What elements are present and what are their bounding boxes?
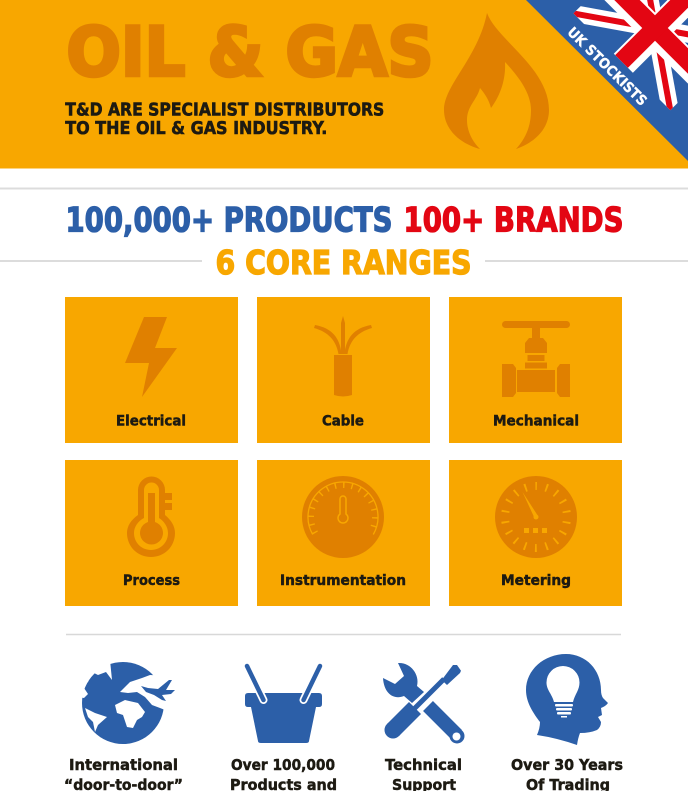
feature: international delivery — [64, 660, 183, 791]
panel: cable — [257, 297, 430, 443]
label: international door-to-door — [64, 756, 183, 791]
panel: metering — [449, 460, 622, 606]
icon: flame — [444, 13, 549, 149]
label: electrical: Electrical — [116, 414, 186, 430]
panel: electrical — [65, 297, 238, 443]
icon: union jack flag — [573, 0, 688, 110]
icon: gauge — [302, 476, 384, 558]
label: instrumentation: Instrumentation — [280, 573, 406, 589]
heading: 6 core ranges: 6 CORE RANGES — [216, 243, 472, 282]
header subtitle: T&D ARE SPECIALIST DISTRIBUTORS — [65, 100, 384, 120]
icon: globe and plane — [78, 660, 175, 744]
panel: process — [65, 460, 238, 606]
feature: products and brands — [230, 666, 337, 791]
icon: head with light bulb — [526, 654, 608, 745]
heading: products and brands: 100+ BRANDS — [404, 200, 624, 240]
label: over 100,000 products: Over 100,000 — [231, 756, 335, 774]
label: over 30 years of trading: Over 30 Years — [511, 756, 623, 774]
icon: wrench and screwdriver — [383, 663, 464, 744]
label: metering: Metering — [501, 573, 571, 589]
corner ribbon: UK stockists — [526, 0, 688, 161]
title: OIL & GAS — [66, 14, 434, 92]
heading: products and brands: 100,000+ PRODUCTS — [66, 200, 392, 240]
label: technical support: Technical — [385, 756, 462, 774]
icon: lightning bolt — [125, 317, 177, 397]
panel: mechanical — [449, 297, 622, 443]
header subtitle: TO THE OIL & GAS INDUSTRY. — [65, 119, 327, 139]
label: over 100,000 products — [230, 756, 337, 791]
label: mechanical: Mechanical — [493, 414, 579, 430]
label: technical support — [385, 756, 462, 791]
header subtitle — [65, 100, 384, 139]
icon: cable — [314, 316, 372, 396]
icon: shopping basket — [245, 666, 322, 743]
icon: valve — [502, 321, 570, 397]
ribbon label: UK STOCKISTS — [564, 24, 650, 109]
icon: meter dial — [495, 476, 577, 558]
feature: years of trading — [511, 654, 623, 791]
icon: thermometer — [127, 476, 175, 557]
label: over 30 years of trading — [511, 756, 623, 791]
label: international door-to-door: International — [69, 756, 178, 774]
label: cable: Cable — [322, 414, 364, 430]
panel: instrumentation — [257, 460, 430, 606]
label: process: Process — [123, 573, 180, 589]
panel: header banner — [0, 0, 688, 169]
feature: technical support — [383, 663, 464, 791]
